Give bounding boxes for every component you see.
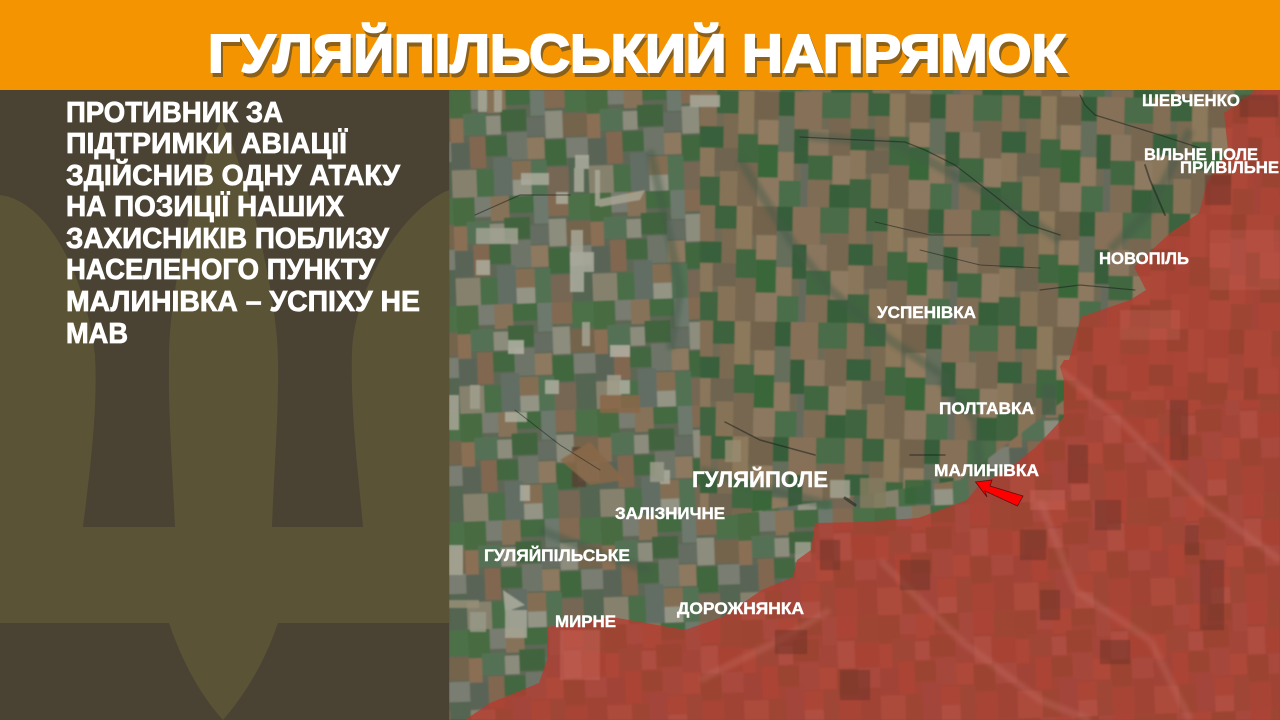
title: ГУЛЯЙПІЛЬСЬКИЙ НАПРЯМОК [208, 23, 1067, 84]
place labels: НОВОПІЛЬ [1099, 249, 1189, 268]
header bar [0, 0, 1280, 90]
description text: МАВ [66, 318, 128, 350]
place labels: ГУЛЯЙПІЛЬСЬКЕ [484, 546, 630, 565]
river valleys [540, 130, 1190, 570]
description text: ПРОТИВНИК ЗА [66, 97, 283, 129]
description text: ПІДТРИМКИ АВІАЦІЇ [66, 127, 348, 160]
trident emblem [0, 120, 449, 720]
place labels [484, 91, 1279, 631]
map detail: pale and vivid fields [449, 90, 1056, 638]
tone overlay [449, 90, 1280, 720]
description text [66, 97, 420, 350]
place labels: ЗАЛІЗНИЧНЕ [615, 504, 725, 523]
description text: НАСЕЛЕНОГО ПУНКТУ [66, 254, 376, 286]
description text: ЗДІЙСНИВ ОДНУ АТАКУ [66, 158, 401, 192]
place labels: МИРНЕ [555, 612, 616, 631]
place labels: ГУЛЯЙПОЛЕ [692, 467, 828, 492]
description text: НА ПОЗИЦІЇ НАШИХ [66, 190, 345, 223]
place labels: ВІЛЬНЕ ПОЛЕ [1144, 145, 1258, 164]
left panel background [0, 90, 449, 720]
place labels: ПОЛТАВКА [939, 399, 1034, 418]
place labels: ПРИВІЛЬНЕ [1180, 158, 1279, 177]
place labels: ШЕВЧЕНКО [1142, 91, 1240, 110]
description text: МАЛИНІВКА – УСПІХУ НЕ [66, 286, 420, 318]
place labels: ДОРОЖНЯНКА [677, 599, 804, 618]
arrow: attack direction [976, 480, 1023, 506]
occupied territory [465, 90, 1280, 720]
place labels: УСПЕНІВКА [877, 303, 976, 322]
satellite map [449, 90, 1280, 720]
place labels: МАЛИНІВКА [934, 461, 1039, 480]
title: ГУЛЯЙПІЛЬСЬКИЙ НАПРЯМОК [210, 27, 1069, 88]
description text: ЗАХИСНИКІВ ПОБЛИЗУ [66, 223, 390, 255]
ravines [475, 95, 1200, 505]
